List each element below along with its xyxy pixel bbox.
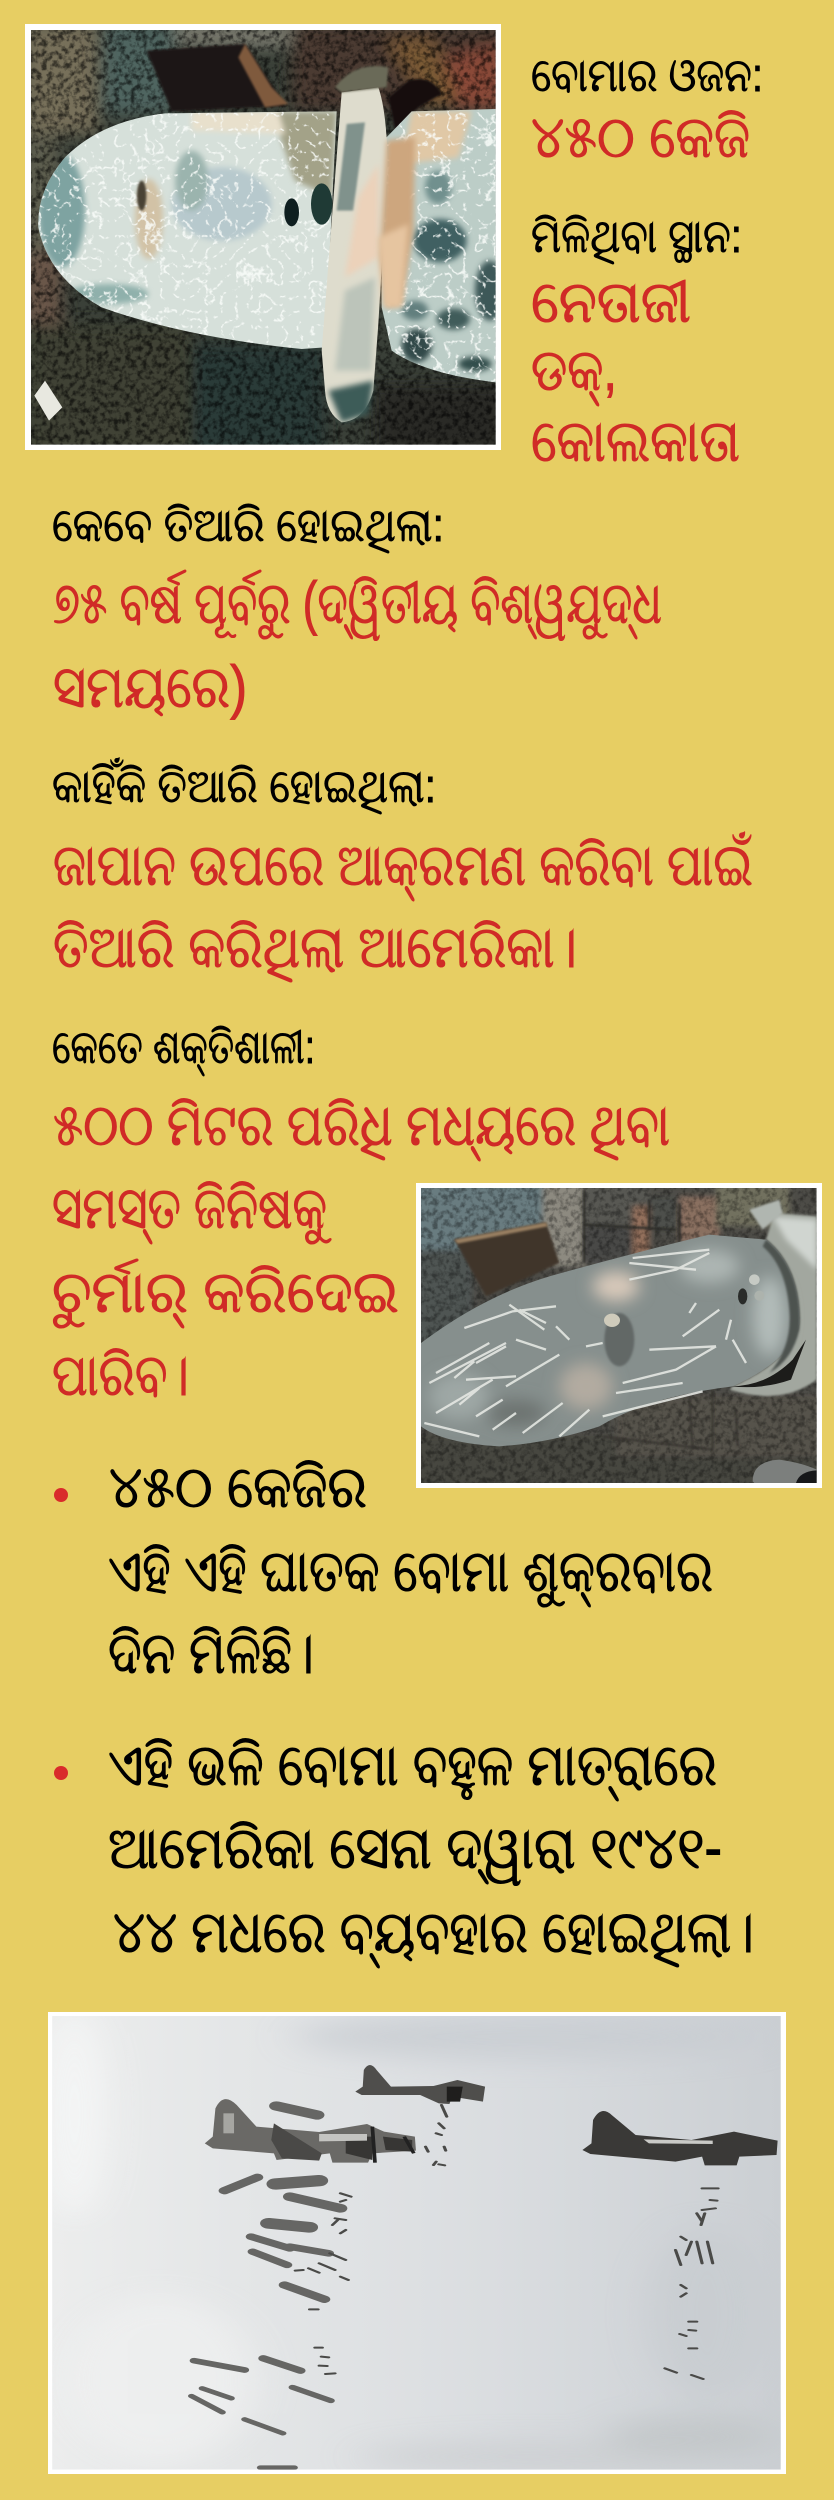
plane: upper middle xyxy=(355,2065,485,2104)
heading: when made: କେବେ ତିଆରି ହୋଇଥିଲା: xyxy=(52,498,444,553)
shoe xyxy=(753,1460,817,1483)
text block: why made xyxy=(52,758,753,982)
text block: how powerful xyxy=(52,1020,670,1408)
text block: weight and location xyxy=(531,48,763,474)
bullet list item 2 xyxy=(54,1732,754,1968)
value: weight: ୪୫୦ କେଜି xyxy=(531,104,750,170)
value: location line 3: କୋଲକାତା xyxy=(531,408,740,474)
photo: bomb lying diagonally with white frame xyxy=(416,1183,826,1490)
bullet list item 1 xyxy=(54,1454,713,1686)
answer line 4: ପାରିବ। xyxy=(52,1342,189,1408)
bullet xyxy=(54,1766,68,1780)
photo: bombers dropping bombs with white frame xyxy=(43,2007,786,2474)
line 3: ଦିନ ମିଳିଛି। xyxy=(108,1620,314,1686)
photo: bomb close-up with white frame xyxy=(25,24,508,457)
heading: why made: କାହିଁକି ତିଆରି ହୋଇଥିଲା: xyxy=(52,758,436,814)
plane: left large xyxy=(205,2099,416,2163)
line 1: ୪୫୦ କେଜିର xyxy=(109,1454,367,1520)
collar xyxy=(729,1200,817,1396)
bombs: small ticks xyxy=(295,2105,718,2379)
answer line 2: ସମସ୍ତ ଜିନିଷକୁ xyxy=(52,1175,331,1245)
paper scrap xyxy=(34,381,62,421)
label: bomb weight: ବୋମାର ଓଜନ: xyxy=(531,48,763,101)
bomb nose and tail xyxy=(38,109,496,382)
bombs: left stream xyxy=(191,2106,340,2468)
line 1: ଏହି ଭଳି ବୋମା ବହୁଳ ମାତ୍ରାରେ xyxy=(108,1732,717,1801)
answer line 1: ୫୦୦ ମିଟର ପରିଧି ମଧ୍ୟରେ ଥିବା xyxy=(53,1092,670,1161)
line 2: ଆମେରିକା ସେନା ଦ୍ୱାରା ୧୯୪୧- xyxy=(108,1815,722,1886)
bomb body xyxy=(421,1235,806,1446)
bomb ring band xyxy=(322,66,415,422)
bullet xyxy=(54,1488,68,1502)
line 2: ଏହି ଏହି ଘାତକ ବୋମା ଶୁକ୍ରବାର xyxy=(108,1538,713,1608)
value: location line 1: ନେତାଜୀ xyxy=(531,269,691,335)
plane: right xyxy=(582,2111,778,2165)
answer line 2: ତିଆରି କରିଥିଲା ଆମେରିକା। xyxy=(53,914,577,982)
heading: how powerful: କେତେ ଶକ୍ତିଶାଳୀ: xyxy=(52,1020,315,1076)
label: found at: ମିଳିଥିବା ସ୍ଥାନ: xyxy=(531,209,742,264)
scratches xyxy=(424,1250,746,1436)
answer line 3: ଚୁର୍ମାର୍ କରିଦେଇ xyxy=(52,1258,399,1329)
value: location line 2: ଡକ୍, xyxy=(531,337,617,406)
text block: when made xyxy=(52,498,662,720)
answer line 2: ସମୟରେ) xyxy=(53,654,247,720)
